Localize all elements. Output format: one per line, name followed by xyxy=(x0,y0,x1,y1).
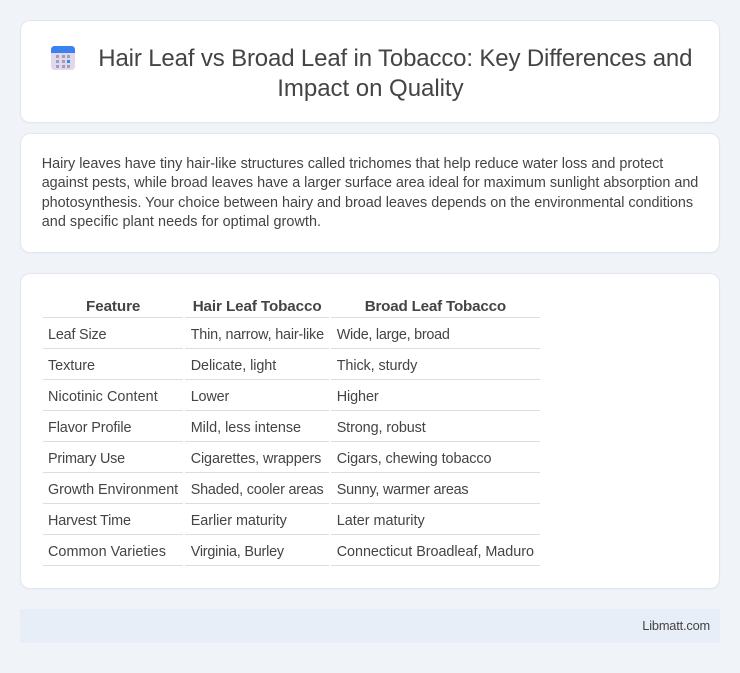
intro paragraph: Hairy leaves have tiny hair-like structures called trichomes that help reduce water loss and protect xyxy=(42,156,663,172)
row: Growth Environment: Shaded, cooler areas xyxy=(191,482,324,498)
row: Primary Use xyxy=(48,451,491,467)
table header xyxy=(86,298,506,315)
row: Leaf Size: Wide, large, broad xyxy=(337,327,450,343)
intro paragraph: and specific plant needs for optimal growth. xyxy=(42,214,321,230)
footer text: Libmatt.com: Libmatt.com xyxy=(642,618,710,633)
panel: comparison table xyxy=(20,273,720,589)
row: Nicotinic Content: Nicotinic Content xyxy=(48,389,158,405)
row: Growth Environment xyxy=(48,482,468,498)
title: Hair Leaf vs Broad Leaf in Tobacco: Key Differences and xyxy=(98,45,692,72)
intro paragraph: against pests, while broad leaves have a larger surface area ideal for maximum sunlight absorption and xyxy=(42,175,698,191)
title: Impact on Quality xyxy=(277,75,464,102)
row: Common Varieties: Connecticut Broadleaf, Maduro xyxy=(337,544,534,560)
table header: Feature xyxy=(86,298,140,315)
row: Flavor Profile xyxy=(48,420,426,436)
row: Harvest Time: Later maturity xyxy=(337,513,425,529)
row: Growth Environment: Growth Environment xyxy=(48,482,178,498)
footer bar xyxy=(20,609,720,643)
row: Primary Use: Cigarettes, wrappers xyxy=(191,451,321,467)
row: Leaf Size: Thin, narrow, hair-like xyxy=(191,327,324,343)
row: Leaf Size: Leaf Size xyxy=(48,327,106,343)
row: Texture xyxy=(48,358,418,374)
row: Harvest Time xyxy=(48,513,425,529)
row: Flavor Profile: Flavor Profile xyxy=(48,420,131,436)
row: Common Varieties xyxy=(48,544,534,560)
row: Common Varieties: Virginia, Burley xyxy=(191,544,284,560)
panel: intro text xyxy=(20,133,720,253)
row: Primary Use: Primary Use xyxy=(48,451,125,467)
row: Harvest Time: Harvest Time xyxy=(48,513,131,529)
row: Nicotinic Content xyxy=(48,389,379,405)
row: Harvest Time: Earlier maturity xyxy=(191,513,287,529)
row: Common Varieties: Common Varieties xyxy=(48,544,166,560)
panel: header xyxy=(20,20,720,123)
row: Flavor Profile: Mild, less intense xyxy=(191,420,301,436)
intro paragraph xyxy=(42,156,698,230)
intro paragraph: photosynthesis. Your choice between hairy and broad leaves depends on the environmental conditions xyxy=(42,195,693,211)
row: Nicotinic Content: Lower xyxy=(191,389,229,405)
table header: Broad Leaf Tobacco xyxy=(365,298,506,315)
row: Texture: Delicate, light xyxy=(191,358,276,374)
row: Leaf Size xyxy=(48,327,450,343)
row: Flavor Profile: Strong, robust xyxy=(337,420,426,436)
row: Nicotinic Content: Higher xyxy=(337,389,379,405)
icon: calendar xyxy=(51,46,75,70)
row: Growth Environment: Sunny, warmer areas xyxy=(337,482,468,498)
title xyxy=(98,45,692,102)
table header: Hair Leaf Tobacco xyxy=(193,298,322,315)
row: Texture: Texture xyxy=(48,358,95,374)
row: Texture: Thick, sturdy xyxy=(337,358,417,374)
row: Primary Use: Cigars, chewing tobacco xyxy=(337,451,491,467)
